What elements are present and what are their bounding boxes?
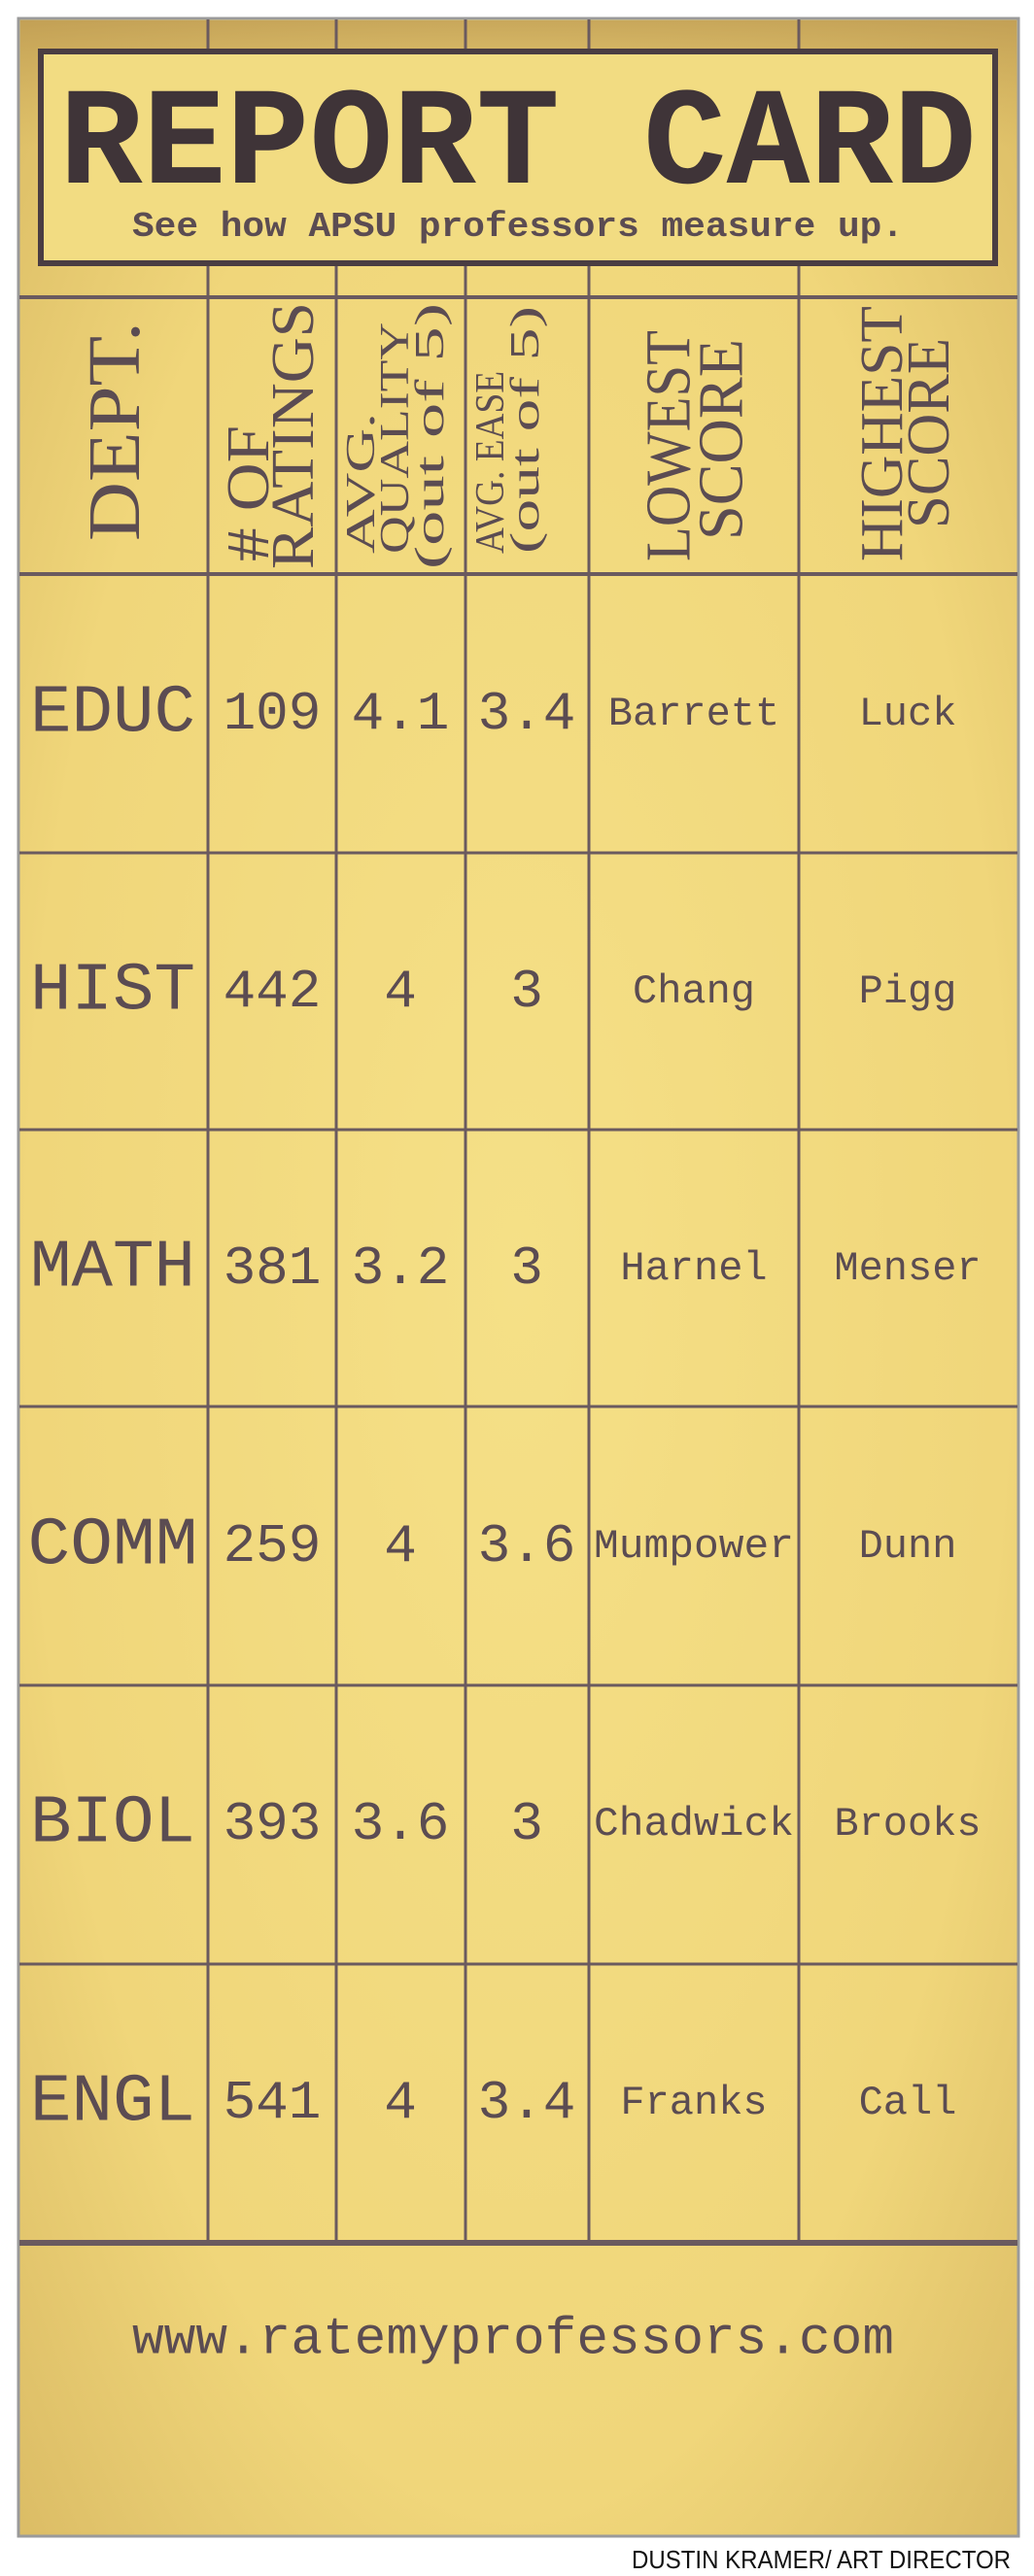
header: highest: HIGHEST — [849, 306, 915, 561]
row: EDUC: EDUC — [30, 676, 195, 752]
row: MATH — [30, 1230, 982, 1307]
row: ENGL: ENGL — [30, 2065, 195, 2141]
row: ENGL: Franks — [620, 2080, 768, 2126]
row: BIOL: 393 — [224, 1793, 321, 1855]
row: HIST: Pigg — [859, 968, 956, 1015]
row: MATH: 3 — [510, 1237, 543, 1300]
row: EDUC: Luck — [859, 691, 956, 737]
row: HIST: 442 — [224, 961, 321, 1023]
column headers — [74, 302, 962, 569]
subtitle: See how APSU professors measure up. — [132, 207, 904, 247]
header: highest — [849, 306, 962, 561]
header: quality: AVG. — [339, 413, 384, 554]
row: BIOL: 3.6 — [352, 1793, 449, 1855]
row: MATH: MATH — [30, 1230, 195, 1307]
row: HIST — [30, 954, 956, 1030]
data rows — [27, 676, 982, 2141]
row: EDUC: 109 — [224, 683, 321, 745]
header: quality: (out of 5) — [408, 303, 453, 569]
title: REPORT CARD — [59, 67, 977, 224]
row: COMM: 3.6 — [478, 1515, 575, 1577]
row: BIOL: Brooks — [834, 1801, 982, 1847]
header: lowest: SCORE — [686, 339, 756, 540]
header: ease: (out of 5) — [503, 306, 548, 554]
header: ease — [468, 306, 548, 554]
source url: www.ratemyprofessors.com — [132, 2310, 894, 2370]
row: HIST: 3 — [510, 961, 543, 1023]
row: MATH: 381 — [224, 1237, 321, 1300]
row: COMM: 259 — [224, 1515, 321, 1577]
credit: DUSTIN KRAMER/ ART DIRECTOR — [632, 2545, 1011, 2574]
row: COMM: 4 — [384, 1515, 417, 1577]
row: HIST: HIST — [30, 954, 195, 1030]
row: ENGL: 3.4 — [478, 2072, 575, 2134]
row: ENGL: 4 — [384, 2072, 417, 2134]
row: EDUC: Barrett — [608, 691, 779, 737]
row: BIOL: 3 — [510, 1793, 543, 1855]
row: COMM — [27, 1508, 956, 1585]
row: BIOL — [30, 1785, 982, 1863]
header: ratings: # OF — [216, 425, 282, 561]
header: ratings — [216, 302, 327, 569]
header: dept: DEPT. — [74, 322, 155, 541]
row: MATH: Harnel — [620, 1245, 768, 1292]
row: ENGL: Call — [859, 2080, 956, 2126]
row: EDUC — [30, 676, 956, 752]
header: lowest — [634, 330, 756, 561]
row: COMM: COMM — [27, 1508, 198, 1585]
row: COMM: Mumpower — [594, 1523, 794, 1570]
row: HIST: Chang — [633, 968, 755, 1015]
row: COMM: Dunn — [859, 1523, 956, 1570]
row: HIST: 4 — [384, 961, 417, 1023]
header: quality: QUALITY — [373, 322, 418, 554]
title box — [41, 51, 995, 263]
row: MATH: 3.2 — [352, 1237, 449, 1300]
header: ease: AVG. EASE — [468, 371, 513, 554]
header: ratings: RATINGS — [260, 302, 327, 569]
row: EDUC: 4.1 — [352, 683, 449, 745]
header: quality — [339, 303, 453, 569]
row: ENGL: 541 — [224, 2072, 321, 2134]
header: highest: SCORE — [896, 338, 962, 528]
row: MATH: Menser — [834, 1245, 982, 1292]
row: BIOL: Chadwick — [594, 1801, 794, 1847]
header: lowest: LOWEST — [634, 330, 704, 561]
row: EDUC: 3.4 — [478, 683, 575, 745]
row: BIOL: BIOL — [30, 1785, 195, 1863]
row: ENGL — [30, 2065, 956, 2141]
